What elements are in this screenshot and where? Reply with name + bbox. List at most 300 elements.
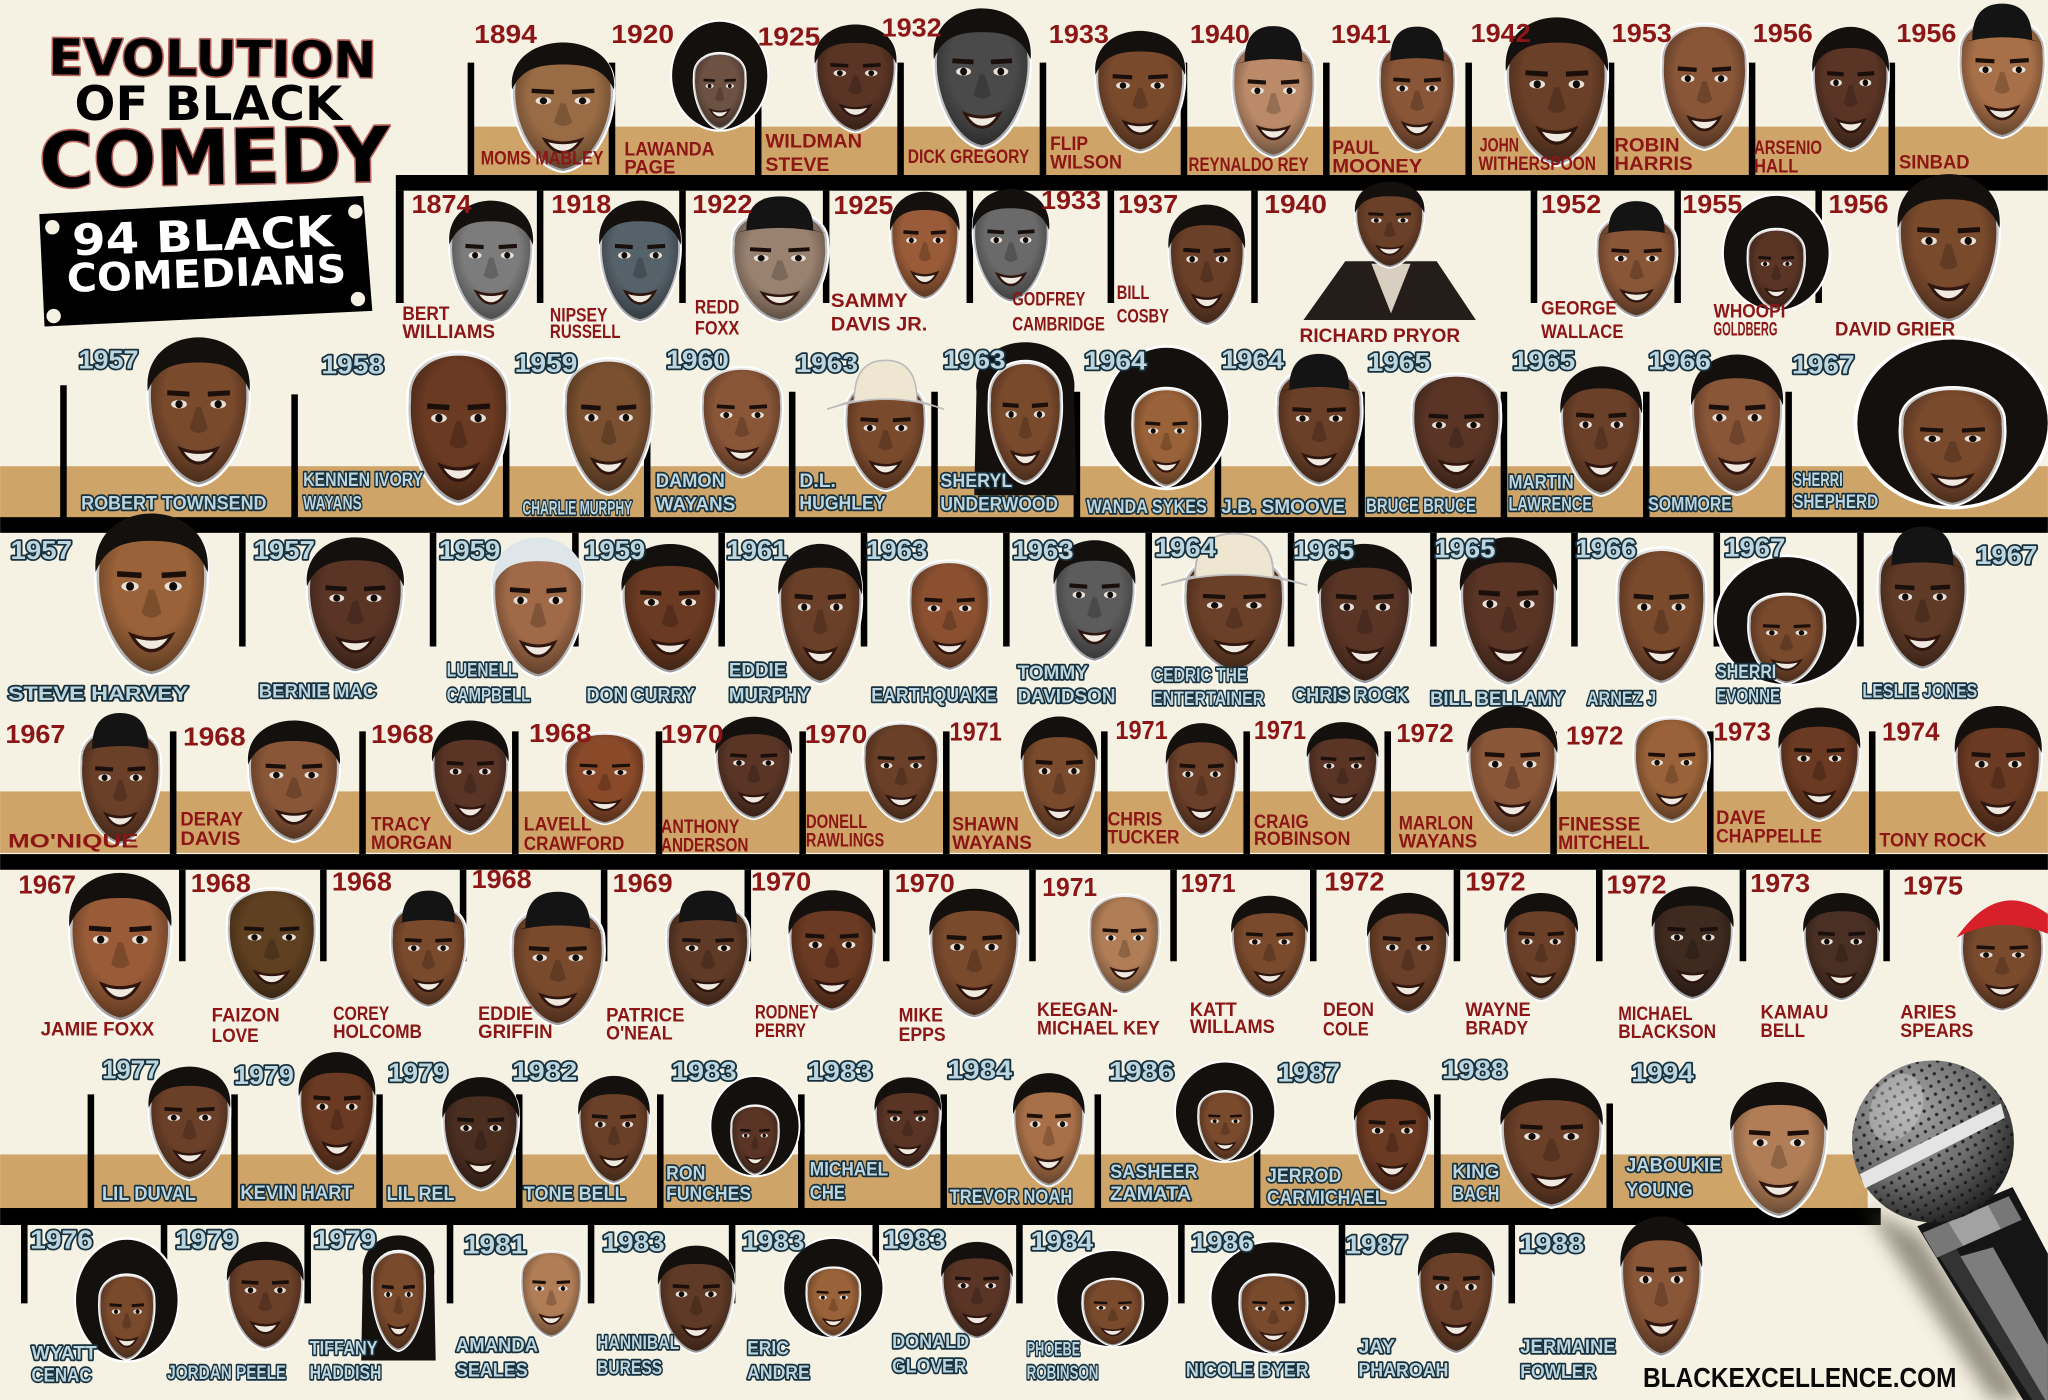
portrait <box>227 1242 304 1349</box>
name: GEORGE <box>1541 298 1617 320</box>
name: JERROD <box>1267 1165 1341 1187</box>
year: 1986 <box>1109 1056 1174 1086</box>
portrait <box>299 1052 375 1173</box>
name: GOLDBERG <box>1714 319 1778 341</box>
name <box>661 816 748 856</box>
comedian: D.L. Hughley <box>795 348 944 514</box>
comedian: Trevor Noah <box>947 1055 1085 1208</box>
portrait <box>1460 537 1557 684</box>
portrait <box>1812 27 1889 150</box>
portrait <box>307 537 404 671</box>
name: TONE BELL <box>524 1183 626 1205</box>
name: WAYANS <box>656 494 735 516</box>
name: LUENELL <box>447 659 517 681</box>
portrait <box>228 889 316 1000</box>
name: WILSON <box>1050 151 1122 173</box>
comedian: Sherri Evonne <box>1715 532 1858 708</box>
portrait with suit <box>1303 182 1476 320</box>
name: EARTHQUAKE <box>871 684 997 706</box>
year: 1972 <box>1396 718 1454 748</box>
name <box>1332 137 1422 177</box>
year: 1960 <box>666 344 729 374</box>
name: DEON <box>1323 999 1374 1021</box>
year: 1956 <box>1828 189 1889 219</box>
year: 1965 <box>1434 534 1495 564</box>
year: 1971 <box>1042 872 1097 902</box>
comedian: Eddie Murphy <box>726 535 862 706</box>
name <box>1050 133 1122 173</box>
name <box>1267 1165 1386 1209</box>
name <box>1108 808 1179 849</box>
name: ROBINSON <box>1027 1362 1098 1384</box>
row 7 comedians <box>102 1052 1827 1216</box>
portrait <box>1467 706 1557 834</box>
row 4 comedians <box>8 514 2037 710</box>
name: FLIP <box>1050 133 1088 155</box>
portrait <box>1021 717 1098 837</box>
year: 1874 <box>412 189 472 219</box>
name: WILLIAMS <box>402 321 495 343</box>
name: ARIES <box>1900 1002 1956 1024</box>
name: ARSENIO <box>1754 137 1822 159</box>
comedian: Tone Bell <box>512 1056 650 1205</box>
portrait <box>934 8 1031 148</box>
name: HUGHLEY <box>799 492 886 514</box>
name: HALL <box>1754 155 1798 177</box>
portrait <box>1560 366 1642 495</box>
comedian: Hannibal Buress <box>597 1227 735 1379</box>
comedian: Robert Townsend <box>78 337 267 514</box>
comedian: Kevin Hart <box>234 1052 375 1204</box>
name: TREVOR NOAH <box>950 1186 1072 1208</box>
name: DICK GREGORY <box>908 146 1029 168</box>
portrait <box>1504 893 1578 1000</box>
name: PAUL <box>1332 137 1379 159</box>
comedian: Bernie Mac <box>253 535 404 702</box>
name: LIL REL <box>387 1183 455 1205</box>
comedian: King Bach <box>1442 1055 1603 1207</box>
portrait <box>728 196 832 321</box>
year: 1970 <box>751 867 811 897</box>
name: NICOLE BYER <box>1186 1359 1309 1381</box>
portrait <box>1855 338 2048 508</box>
portrait <box>1095 31 1185 151</box>
name: FOXX <box>695 317 739 339</box>
comedian: Keegan-Michael Key <box>1037 872 1160 1039</box>
year: 1971 <box>1115 715 1168 745</box>
comedian: Sommore <box>1648 346 1783 516</box>
name: UNDERWOOD <box>940 494 1058 516</box>
name: CEDRIC THE <box>1152 665 1247 687</box>
portrait <box>973 189 1049 301</box>
portrait <box>1273 354 1366 484</box>
year: 1956 <box>1753 18 1813 48</box>
portrait <box>1056 1250 1169 1347</box>
comedian: Shawn Wayans <box>950 716 1098 854</box>
name <box>806 811 884 851</box>
name <box>1358 1336 1448 1381</box>
name: SOMMORE <box>1648 494 1732 516</box>
name: JOHN <box>1480 134 1519 156</box>
year: 1971 <box>1181 868 1236 898</box>
name: EVONNE <box>1716 686 1780 708</box>
name: TIFFANY <box>310 1337 378 1359</box>
comedian: Lil Rel <box>387 1057 519 1205</box>
name: BACH <box>1452 1183 1499 1205</box>
year: 1968 <box>191 868 251 898</box>
portrait <box>1617 549 1705 683</box>
portrait <box>783 1238 884 1338</box>
name <box>1037 999 1160 1039</box>
footer website: BLACKEXCELLENCE.COM <box>1643 1362 1956 1393</box>
year: 1972 <box>1566 720 1623 750</box>
year: 1941 <box>1331 19 1391 49</box>
portrait <box>1367 893 1449 1013</box>
comedian: Jermaine Fowler <box>1519 1216 1702 1383</box>
comedian: Richard Pryor <box>1264 182 1476 347</box>
name: KEEGAN- <box>1037 999 1118 1021</box>
name <box>1465 999 1531 1039</box>
name: WAYANS <box>952 832 1032 854</box>
comedian: Corey Holcomb <box>332 867 470 1043</box>
name: EPPS <box>899 1024 946 1046</box>
portrait <box>710 1076 800 1176</box>
name <box>1558 814 1650 854</box>
name <box>524 814 624 855</box>
portrait <box>408 353 509 503</box>
portrait <box>1231 896 1308 997</box>
name: CHRIS <box>1108 808 1162 830</box>
name: ENTERTAINER <box>1152 688 1264 710</box>
year: 1963 <box>795 348 858 378</box>
comedian: Arnez J <box>1575 534 1705 710</box>
comedian: Eric Andre <box>742 1226 884 1384</box>
portrait <box>929 889 1019 1017</box>
comedian: Sammy Davis Jr. <box>831 190 960 335</box>
name: WALLACE <box>1541 321 1623 343</box>
year: 1933 <box>1041 185 1101 215</box>
name: BILL BELLAMY <box>1430 688 1565 710</box>
portrait <box>76 713 164 844</box>
name: DONELL <box>806 811 867 833</box>
comedian: Whoopi Goldberg <box>1682 189 1830 341</box>
comedian: Marlon Wayans <box>1396 706 1557 853</box>
name <box>1754 137 1822 177</box>
name <box>1017 662 1115 708</box>
name: DAVIS <box>180 828 240 850</box>
comedian: Eddie Griffin <box>472 864 608 1043</box>
portrait <box>578 1076 650 1183</box>
comedian: Michael Che <box>807 1056 941 1204</box>
name: LESLIE JONES <box>1862 680 1977 702</box>
portrait <box>69 873 171 1020</box>
portrait <box>95 514 208 674</box>
name <box>729 659 810 706</box>
name: STEVE HARVEY <box>8 683 188 705</box>
comedian: Donald Glover <box>883 1225 1013 1378</box>
year: 1988 <box>1519 1228 1584 1258</box>
year: 1967 <box>1792 350 1855 380</box>
name: BELL <box>1761 1020 1805 1042</box>
name: WYATT <box>31 1343 97 1365</box>
comedian: Chris Tucker <box>1108 715 1237 849</box>
name: WAYANS <box>303 492 362 514</box>
name: DON CURRY <box>586 684 695 706</box>
portrait <box>1874 527 1971 669</box>
name: DAVID GRIER <box>1835 319 1955 341</box>
name: ROBINSON <box>1254 828 1350 850</box>
name: CRAIG <box>1254 811 1309 833</box>
name: SASHEER <box>1110 1161 1198 1183</box>
comedian: Chris Rock <box>1293 535 1412 706</box>
name: HARRIS <box>1614 153 1693 175</box>
year: 1932 <box>882 13 942 43</box>
portrait <box>521 1252 581 1337</box>
name: CENAC <box>31 1365 92 1387</box>
name <box>799 470 886 514</box>
year: 1979 <box>175 1225 238 1255</box>
year: 1968 <box>371 719 434 749</box>
portrait <box>1103 346 1230 489</box>
name: MIKE <box>899 1004 943 1026</box>
year: 1970 <box>661 719 724 749</box>
name: MICHAEL <box>810 1158 888 1180</box>
name: TOMMY <box>1017 662 1088 684</box>
comedian: Charlie Murphy <box>515 348 653 520</box>
name: SHERRI <box>1716 661 1776 683</box>
comedian: Amanda Seales <box>456 1230 581 1381</box>
comedian: Wyatt Cenac <box>30 1225 179 1387</box>
name <box>747 1337 810 1384</box>
name: PHAROAH <box>1358 1359 1448 1381</box>
name <box>1793 469 1878 513</box>
comedian: Cedric the Entertainer <box>1152 532 1307 710</box>
portrait <box>815 25 896 132</box>
name <box>952 814 1032 854</box>
name: BRADY <box>1465 1017 1528 1039</box>
name <box>656 470 735 516</box>
comedian: Bill Cosby <box>1117 189 1245 328</box>
name: FAIZON <box>212 1004 280 1026</box>
year: 1957 <box>78 344 139 374</box>
name: WILLAMS <box>1190 1016 1275 1038</box>
name: RODNEY <box>755 1002 819 1024</box>
portrait <box>1375 27 1459 151</box>
name <box>1478 134 1596 175</box>
year: 1967 <box>18 869 76 899</box>
portrait <box>387 891 470 1007</box>
portrait <box>1723 195 1830 311</box>
year: 1963 <box>943 344 1006 374</box>
name <box>1152 665 1264 710</box>
comedian: Jordan Peele <box>167 1225 304 1384</box>
year: 1961 <box>726 535 788 565</box>
portrait <box>890 192 960 299</box>
comedian: Dave Chappelle <box>1714 707 1860 847</box>
name: LIL DUVAL <box>102 1183 196 1205</box>
name <box>1761 1002 1828 1042</box>
name <box>402 303 495 343</box>
name: COLE <box>1323 1019 1369 1041</box>
portrait <box>1354 1080 1431 1192</box>
comedian: Redd Foxx <box>692 189 832 339</box>
year: 1894 <box>474 19 537 49</box>
year: 1979 <box>314 1225 376 1255</box>
comedian: Craig Robinson <box>1254 715 1378 850</box>
name <box>892 1331 969 1378</box>
name: STEVE <box>765 154 829 176</box>
year: 1964 <box>1155 532 1216 562</box>
portrait <box>1166 723 1237 836</box>
name <box>333 1003 422 1043</box>
name: CHARLIE MURPHY <box>523 498 632 520</box>
portrait <box>492 537 584 677</box>
plaque: 94 black comedians <box>39 196 372 326</box>
comedian: Robin Harris <box>1612 18 1747 175</box>
comedian: Bruce Bruce <box>1366 347 1500 517</box>
portrait <box>1228 26 1318 157</box>
name: CARMICHAEL <box>1267 1187 1386 1209</box>
name: MOONEY <box>1332 155 1422 177</box>
name <box>1012 289 1105 335</box>
year: 1987 <box>1345 1230 1408 1260</box>
name: ERIC <box>747 1337 789 1359</box>
portrait <box>1634 718 1709 821</box>
portrait <box>621 544 719 673</box>
year: 1959 <box>584 535 645 565</box>
year: 1970 <box>805 719 867 749</box>
comedian: Nicole Byer <box>1186 1227 1337 1381</box>
comedian: Deray Davis <box>180 720 340 850</box>
name <box>1190 999 1275 1038</box>
name: ANDERSON <box>661 834 748 856</box>
comedian: Donell Rawlings <box>805 719 939 851</box>
name: GRIFFIN <box>478 1021 553 1043</box>
year: 1984 <box>947 1055 1013 1085</box>
year: 1942 <box>1471 18 1531 48</box>
year: 1979 <box>388 1057 448 1087</box>
name: BERT <box>402 303 449 325</box>
name <box>1541 298 1623 343</box>
name: MO'NIQUE <box>8 831 139 853</box>
comedian: Jerrod Carmichael <box>1267 1057 1431 1209</box>
name <box>624 138 714 179</box>
name: HADDISH <box>310 1362 381 1384</box>
name: BRUCE BRUCE <box>1366 495 1476 517</box>
name: CRAWFORD <box>524 833 624 855</box>
name: LAVELL <box>524 814 592 836</box>
comedian: Anthony Anderson <box>661 717 792 856</box>
year: 1988 <box>1442 1055 1507 1085</box>
name: WAYANS <box>1399 831 1477 853</box>
portrait <box>565 359 653 494</box>
name: SHAWN <box>952 814 1019 836</box>
comedian: Damon Wayans <box>656 344 782 516</box>
year: 1964 <box>1084 346 1147 376</box>
year: 1964 <box>1221 344 1284 374</box>
year: 1957 <box>11 535 72 565</box>
comedian: Sasheer Zamata <box>1109 1056 1275 1205</box>
name: WANDA SYKES <box>1087 496 1207 518</box>
name: REDD <box>695 296 739 318</box>
name: WHOOPI <box>1714 300 1785 322</box>
portrait <box>1054 540 1135 661</box>
portrait <box>715 717 792 819</box>
year: 1972 <box>1606 869 1667 899</box>
name: BURESS <box>597 1357 662 1379</box>
name <box>1900 1002 1973 1042</box>
portrait <box>75 1238 179 1362</box>
name: PAGE <box>624 157 675 179</box>
comedian: Dick Gregory <box>882 8 1031 168</box>
year: 1925 <box>758 22 820 52</box>
comedian: Michael Blackson <box>1606 869 1734 1043</box>
year: 1968 <box>332 867 392 897</box>
portrait <box>1715 556 1858 685</box>
name: MICHAEL KEY <box>1037 1017 1160 1039</box>
name <box>1716 807 1822 847</box>
portrait <box>1500 1078 1603 1207</box>
year: 1956 <box>1896 18 1956 48</box>
name: KAMAU <box>1761 1002 1828 1024</box>
name: NIPSEY <box>550 304 607 326</box>
name <box>1716 661 1780 708</box>
year: 1940 <box>1264 189 1327 219</box>
year: 1983 <box>883 1225 946 1255</box>
name <box>478 1003 553 1043</box>
name: DERAY <box>180 808 243 830</box>
name: JERMAINE <box>1520 1336 1616 1358</box>
name: SHERYL <box>940 470 1012 492</box>
year: 1971 <box>950 716 1002 746</box>
name: YOUNG <box>1626 1179 1693 1201</box>
name <box>456 1335 538 1381</box>
name <box>1714 300 1785 341</box>
name <box>1626 1154 1721 1201</box>
name: ANTHONY <box>661 816 739 838</box>
name: SPEARS <box>1900 1020 1973 1042</box>
year: 1977 <box>102 1055 159 1085</box>
portrait <box>1897 174 2000 321</box>
name: FINESSE <box>1558 814 1640 836</box>
name: D.L. <box>799 470 836 492</box>
comedian: Tracy Morgan <box>371 719 509 854</box>
year: 1933 <box>1049 19 1109 49</box>
comedian: Phoebe Robinson <box>1027 1226 1169 1384</box>
name <box>310 1337 381 1384</box>
comedian: Luenell Campbell <box>439 535 584 706</box>
portrait <box>789 890 876 1011</box>
portrait <box>449 201 533 321</box>
year: 1965 <box>1512 346 1575 376</box>
comedian: Ron Funches <box>666 1056 800 1205</box>
portrait <box>1161 534 1307 671</box>
portrait <box>1418 1232 1495 1353</box>
comedian: Tommy Davidson <box>1012 535 1135 708</box>
name <box>212 1004 280 1047</box>
year: 1987 <box>1277 1057 1340 1087</box>
comedian: Reynaldo Rey <box>1189 19 1318 176</box>
portrait <box>671 21 768 131</box>
comedian: Martin Lawrence <box>1509 346 1642 516</box>
year: 1959 <box>515 348 577 378</box>
name: SHEPHERD <box>1793 491 1878 513</box>
comedian: Earthquake <box>866 535 997 706</box>
name <box>765 131 862 176</box>
year: 1968 <box>472 864 532 894</box>
comedian: Steve Harvey <box>8 514 208 705</box>
comedian: Leslie Jones <box>1862 527 2037 702</box>
